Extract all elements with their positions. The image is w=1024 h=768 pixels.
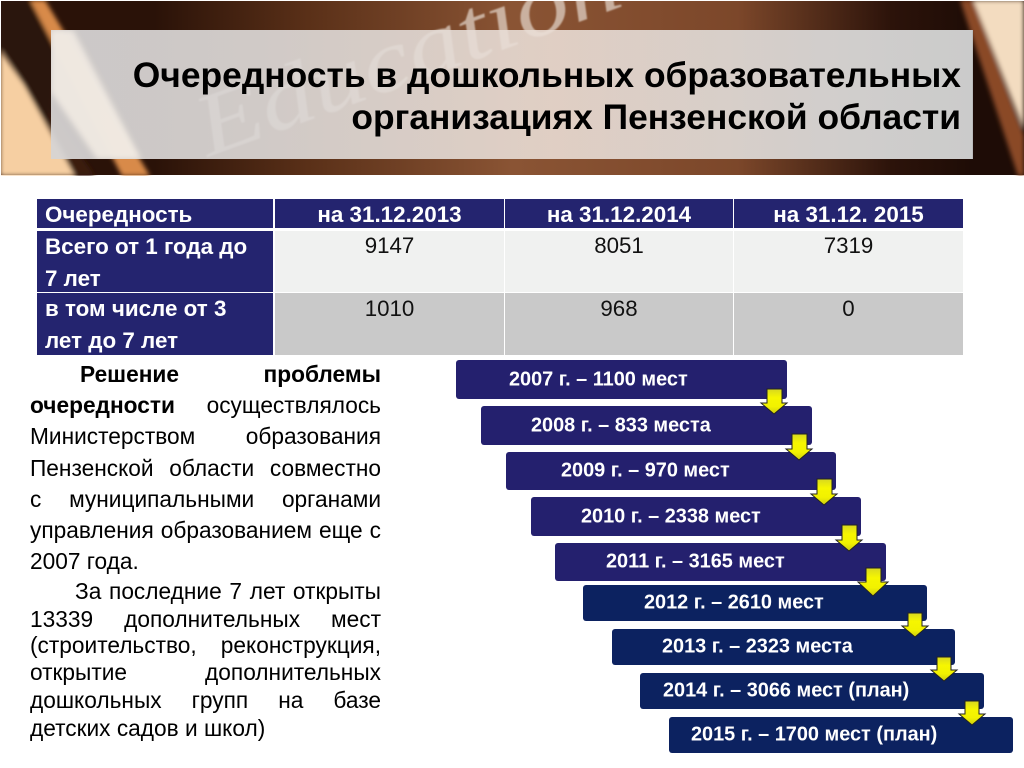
banner background photo (1, 0, 1024, 176)
text block: description: с муниципальными органами (30, 486, 381, 512)
arrow 4 (836, 525, 862, 551)
table row: total: 8051 (594, 233, 644, 258)
light band across panel (51, 30, 140, 159)
bar 2008 (481, 406, 812, 445)
bar 2010: 2010 г. – 2338 мест (581, 505, 761, 527)
text block: description: Министерством образования (30, 423, 381, 449)
table row: from 3 to 7 years: 1010 (365, 296, 414, 321)
text block: description: очередности осуществлялось (30, 392, 381, 418)
text block: description: 2007 года. (30, 548, 139, 574)
table row: total: 7319 (824, 233, 873, 258)
table row: from 3 to 7 years: 0 (842, 296, 855, 321)
bar 2008: 2008 г. – 833 места (531, 414, 711, 436)
text block: description: За последние 7 лет открыты (75, 578, 381, 604)
arrow 6 (902, 613, 928, 637)
text block: description: Пензенской области совместно (30, 455, 381, 481)
bar 2009 (506, 452, 836, 490)
table row: total: 7 лет (45, 266, 101, 291)
bar 2013 (612, 629, 955, 665)
text block: description: 13339 дополнительных мест (30, 606, 381, 632)
table header row: Очередность (45, 202, 192, 227)
text block: description: дошкольных групп на базе (30, 687, 381, 713)
bar 2009: 2009 г. – 970 мест (561, 460, 730, 482)
title: организациях Пензенской области (351, 97, 961, 137)
bar 2012 (583, 585, 927, 621)
table row: from 3 to 7 years: в том числе от 3 (45, 296, 226, 321)
table row: from 3 to 7 years: 968 (600, 296, 638, 321)
arrow 7 (931, 657, 957, 681)
table: waiting list (37, 199, 963, 355)
bar 2011 (555, 543, 886, 581)
table header row: на 31.12.2014 (547, 202, 691, 227)
table row: from 3 to 7 years: лет до 7 лет (45, 328, 178, 353)
bar 2007: 2007 г. – 1100 мест (509, 368, 688, 390)
arrow 1 (761, 389, 787, 414)
arrow 5 (858, 568, 888, 596)
bar 2015 (669, 717, 1013, 753)
text block: description: детских садов и школ) (30, 715, 265, 741)
text block: description: открытие дополнительных (30, 659, 381, 685)
text block: description: управления образованием еще с (30, 517, 381, 543)
title: Очередность в дошкольных образовательных (133, 55, 961, 95)
table row: total: Всего от 1 года до (45, 234, 247, 259)
text block: description: (строительство, реконструкция, (30, 632, 381, 658)
title panel (51, 30, 973, 159)
text block: description: Решение проблемы (80, 361, 381, 387)
table row: from 3 to 7 years (37, 293, 963, 355)
table header row: на 31.12.2013 (317, 202, 462, 227)
bar 2013: 2013 г. – 2323 места (662, 636, 853, 658)
arrow 3 (811, 479, 837, 505)
text block: description (30, 361, 381, 741)
table row: total: 9147 (365, 233, 414, 258)
bar 2014: 2014 г. – 3066 мест (план) (663, 680, 909, 702)
staircase: places by year (456, 360, 1013, 753)
bar 2014 (640, 673, 984, 709)
arrow 2 (786, 434, 812, 460)
bar 2015: 2015 г. – 1700 мест (план) (691, 724, 937, 746)
table header row (37, 199, 963, 228)
bar 2011: 2011 г. – 3165 мест (606, 550, 785, 572)
title (133, 55, 961, 137)
arrow 8 (959, 701, 985, 725)
bar 2007 (456, 360, 787, 399)
table header row: на 31.12. 2015 (773, 202, 924, 227)
table row: total (37, 231, 963, 292)
bar 2012: 2012 г. – 2610 мест (644, 592, 824, 614)
bar 2010 (531, 497, 861, 536)
